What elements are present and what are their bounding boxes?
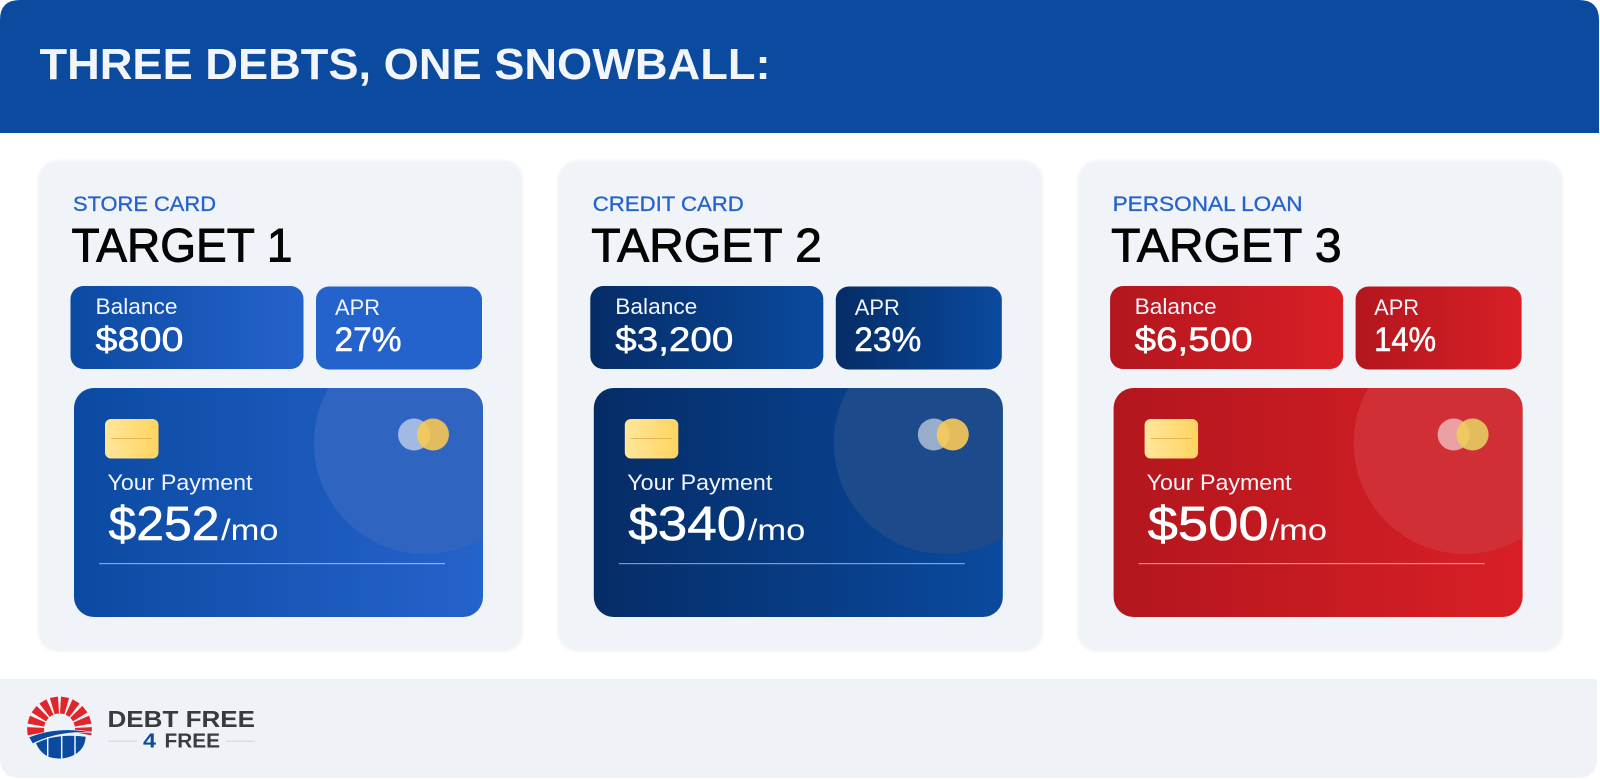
payment label: Your Payment — [627, 470, 772, 495]
payment amount: $340 — [628, 498, 746, 551]
logo — [28, 697, 255, 760]
payment label: Your Payment — [1147, 470, 1292, 495]
apr box — [316, 286, 482, 370]
target heading: TARGET 1 — [72, 218, 292, 272]
balance box: Balance — [615, 294, 697, 319]
panel: target 2 — [558, 160, 1056, 652]
panel: target 1 — [38, 160, 536, 652]
debt type label: STORE CARD — [73, 193, 216, 216]
payment amount: /mo — [221, 514, 278, 547]
payment card — [594, 388, 1003, 617]
payment amount — [108, 498, 278, 551]
apr box — [836, 286, 1002, 370]
balance box — [70, 286, 304, 369]
payment amount: $252 — [108, 498, 220, 551]
balance box: Balance — [96, 294, 178, 319]
icon: card network circles — [398, 418, 449, 450]
icon: card network circles — [918, 418, 969, 450]
apr box — [1356, 286, 1522, 370]
logo wordmark — [108, 706, 255, 753]
logo wordmark: DEBT FREE — [108, 706, 255, 732]
balance box: Balance — [1135, 294, 1217, 319]
payment amount: /mo — [748, 514, 805, 547]
payment card — [74, 388, 483, 617]
payment amount — [628, 498, 805, 551]
balance box: $6,500 — [1135, 321, 1253, 359]
debt type label: CREDIT CARD — [593, 193, 744, 216]
balance box — [1110, 286, 1343, 369]
icon: card chip — [1145, 419, 1198, 458]
payment amount — [1148, 498, 1327, 551]
apr box: 27% — [334, 321, 402, 359]
title: THREE DEBTS, ONE SNOWBALL: — [40, 40, 770, 89]
payment amount: $500 — [1148, 498, 1269, 551]
icon: card network circles — [1438, 418, 1489, 450]
logo wordmark: 4 — [143, 731, 157, 753]
payment amount: /mo — [1270, 514, 1327, 547]
apr box: 23% — [854, 321, 921, 359]
target heading: TARGET 2 — [591, 218, 822, 272]
debt type label: PERSONAL LOAN — [1113, 193, 1303, 216]
apr box: APR — [855, 295, 900, 320]
balance box — [590, 286, 823, 369]
balance box: $800 — [96, 321, 184, 359]
apr box: APR — [1374, 295, 1419, 320]
footer band — [0, 679, 1597, 778]
logo wordmark: FREE — [164, 731, 220, 753]
icon: card chip — [625, 419, 678, 458]
payment label: Your Payment — [108, 470, 252, 495]
payment card — [1114, 388, 1523, 617]
apr box: APR — [335, 295, 380, 320]
header banner — [0, 0, 1599, 133]
panel: target 3 — [1078, 160, 1576, 652]
apr box: 14% — [1374, 321, 1436, 359]
target heading: TARGET 3 — [1111, 218, 1342, 272]
icon: sun rays and bridge — [28, 697, 92, 760]
icon: card chip — [105, 419, 158, 458]
balance box: $3,200 — [615, 321, 733, 359]
